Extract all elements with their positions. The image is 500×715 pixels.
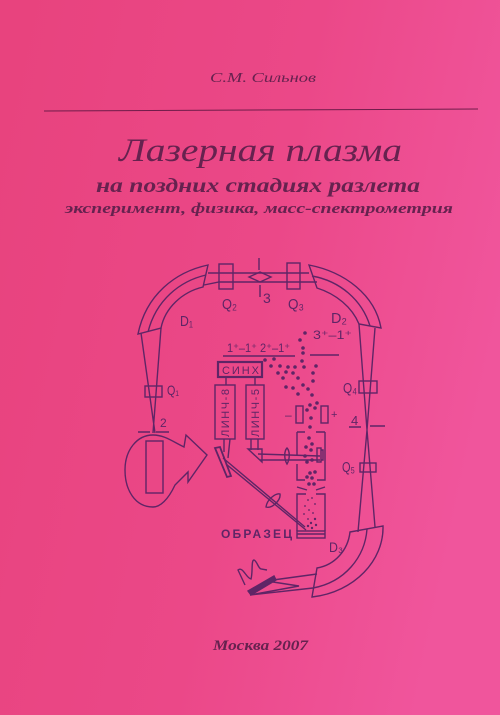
quadrupole Q4, Q5 and right beam: Q₄ <box>343 380 357 397</box>
charge ratio labels <box>223 328 352 356</box>
deflector D3 and detector beam <box>250 526 383 597</box>
author: С.М. Сильнов <box>210 71 316 86</box>
publisher and year: Москва 2007 <box>212 638 309 654</box>
pulse generators: ЛИНЧ-5 <box>250 389 262 437</box>
laser mirrors and lenses <box>215 447 323 530</box>
quadrupole Q2 and Q3 with lens <box>204 258 317 313</box>
pulse generators: ЛИНЧ-8 <box>220 389 232 437</box>
sample label: ОБРАЗЕЦ <box>221 527 292 541</box>
subtitle: на поздних стадиях разлета <box>96 175 420 197</box>
deflector D3 and detector beam: D₃ <box>329 539 343 555</box>
ion optics boxes <box>285 406 337 538</box>
charge ratio labels: 3⁺–1⁺ <box>313 328 352 342</box>
pulse generators <box>215 377 264 458</box>
quadrupole Q1 and left beam: 2 <box>160 416 167 430</box>
divider rule <box>44 109 478 111</box>
sync block: СИНХ <box>222 365 260 377</box>
quadrupole Q4, Q5 and right beam: 4 <box>351 413 358 428</box>
deflector D1: D₁ <box>180 313 193 330</box>
ion dots <box>263 331 319 529</box>
laser circle with arrow <box>125 432 207 507</box>
quadrupole Q1 and left beam: Q₁ <box>167 382 179 398</box>
quadrupole Q1 and left beam <box>141 328 179 433</box>
sync block <box>218 362 262 377</box>
deflector D1 <box>138 265 208 334</box>
mass spectrometer schematic <box>125 258 385 597</box>
quadrupole Q2 and Q3 with lens: 3 <box>263 290 271 306</box>
quadrupole Q4, Q5 and right beam: Q₅ <box>342 459 355 476</box>
quadrupole Q2 and Q3 with lens: Q₂ <box>222 296 237 313</box>
subject line: эксперимент, физика, масс-спектрометрия <box>64 201 453 217</box>
quadrupole Q2 and Q3 with lens: Q₃ <box>288 296 304 313</box>
quadrupole Q4, Q5 and right beam <box>342 324 385 532</box>
charge ratio labels: 1⁺–1⁺ 2⁺–1⁺ <box>227 341 290 355</box>
ion optics boxes: + <box>331 409 337 421</box>
detector plate and spectrum peaks <box>238 560 276 595</box>
title: Лазерная плазма <box>118 133 402 169</box>
deflector D2 <box>309 265 381 328</box>
ion optics boxes: – <box>285 408 292 422</box>
deflector D2: D₂ <box>331 310 347 327</box>
